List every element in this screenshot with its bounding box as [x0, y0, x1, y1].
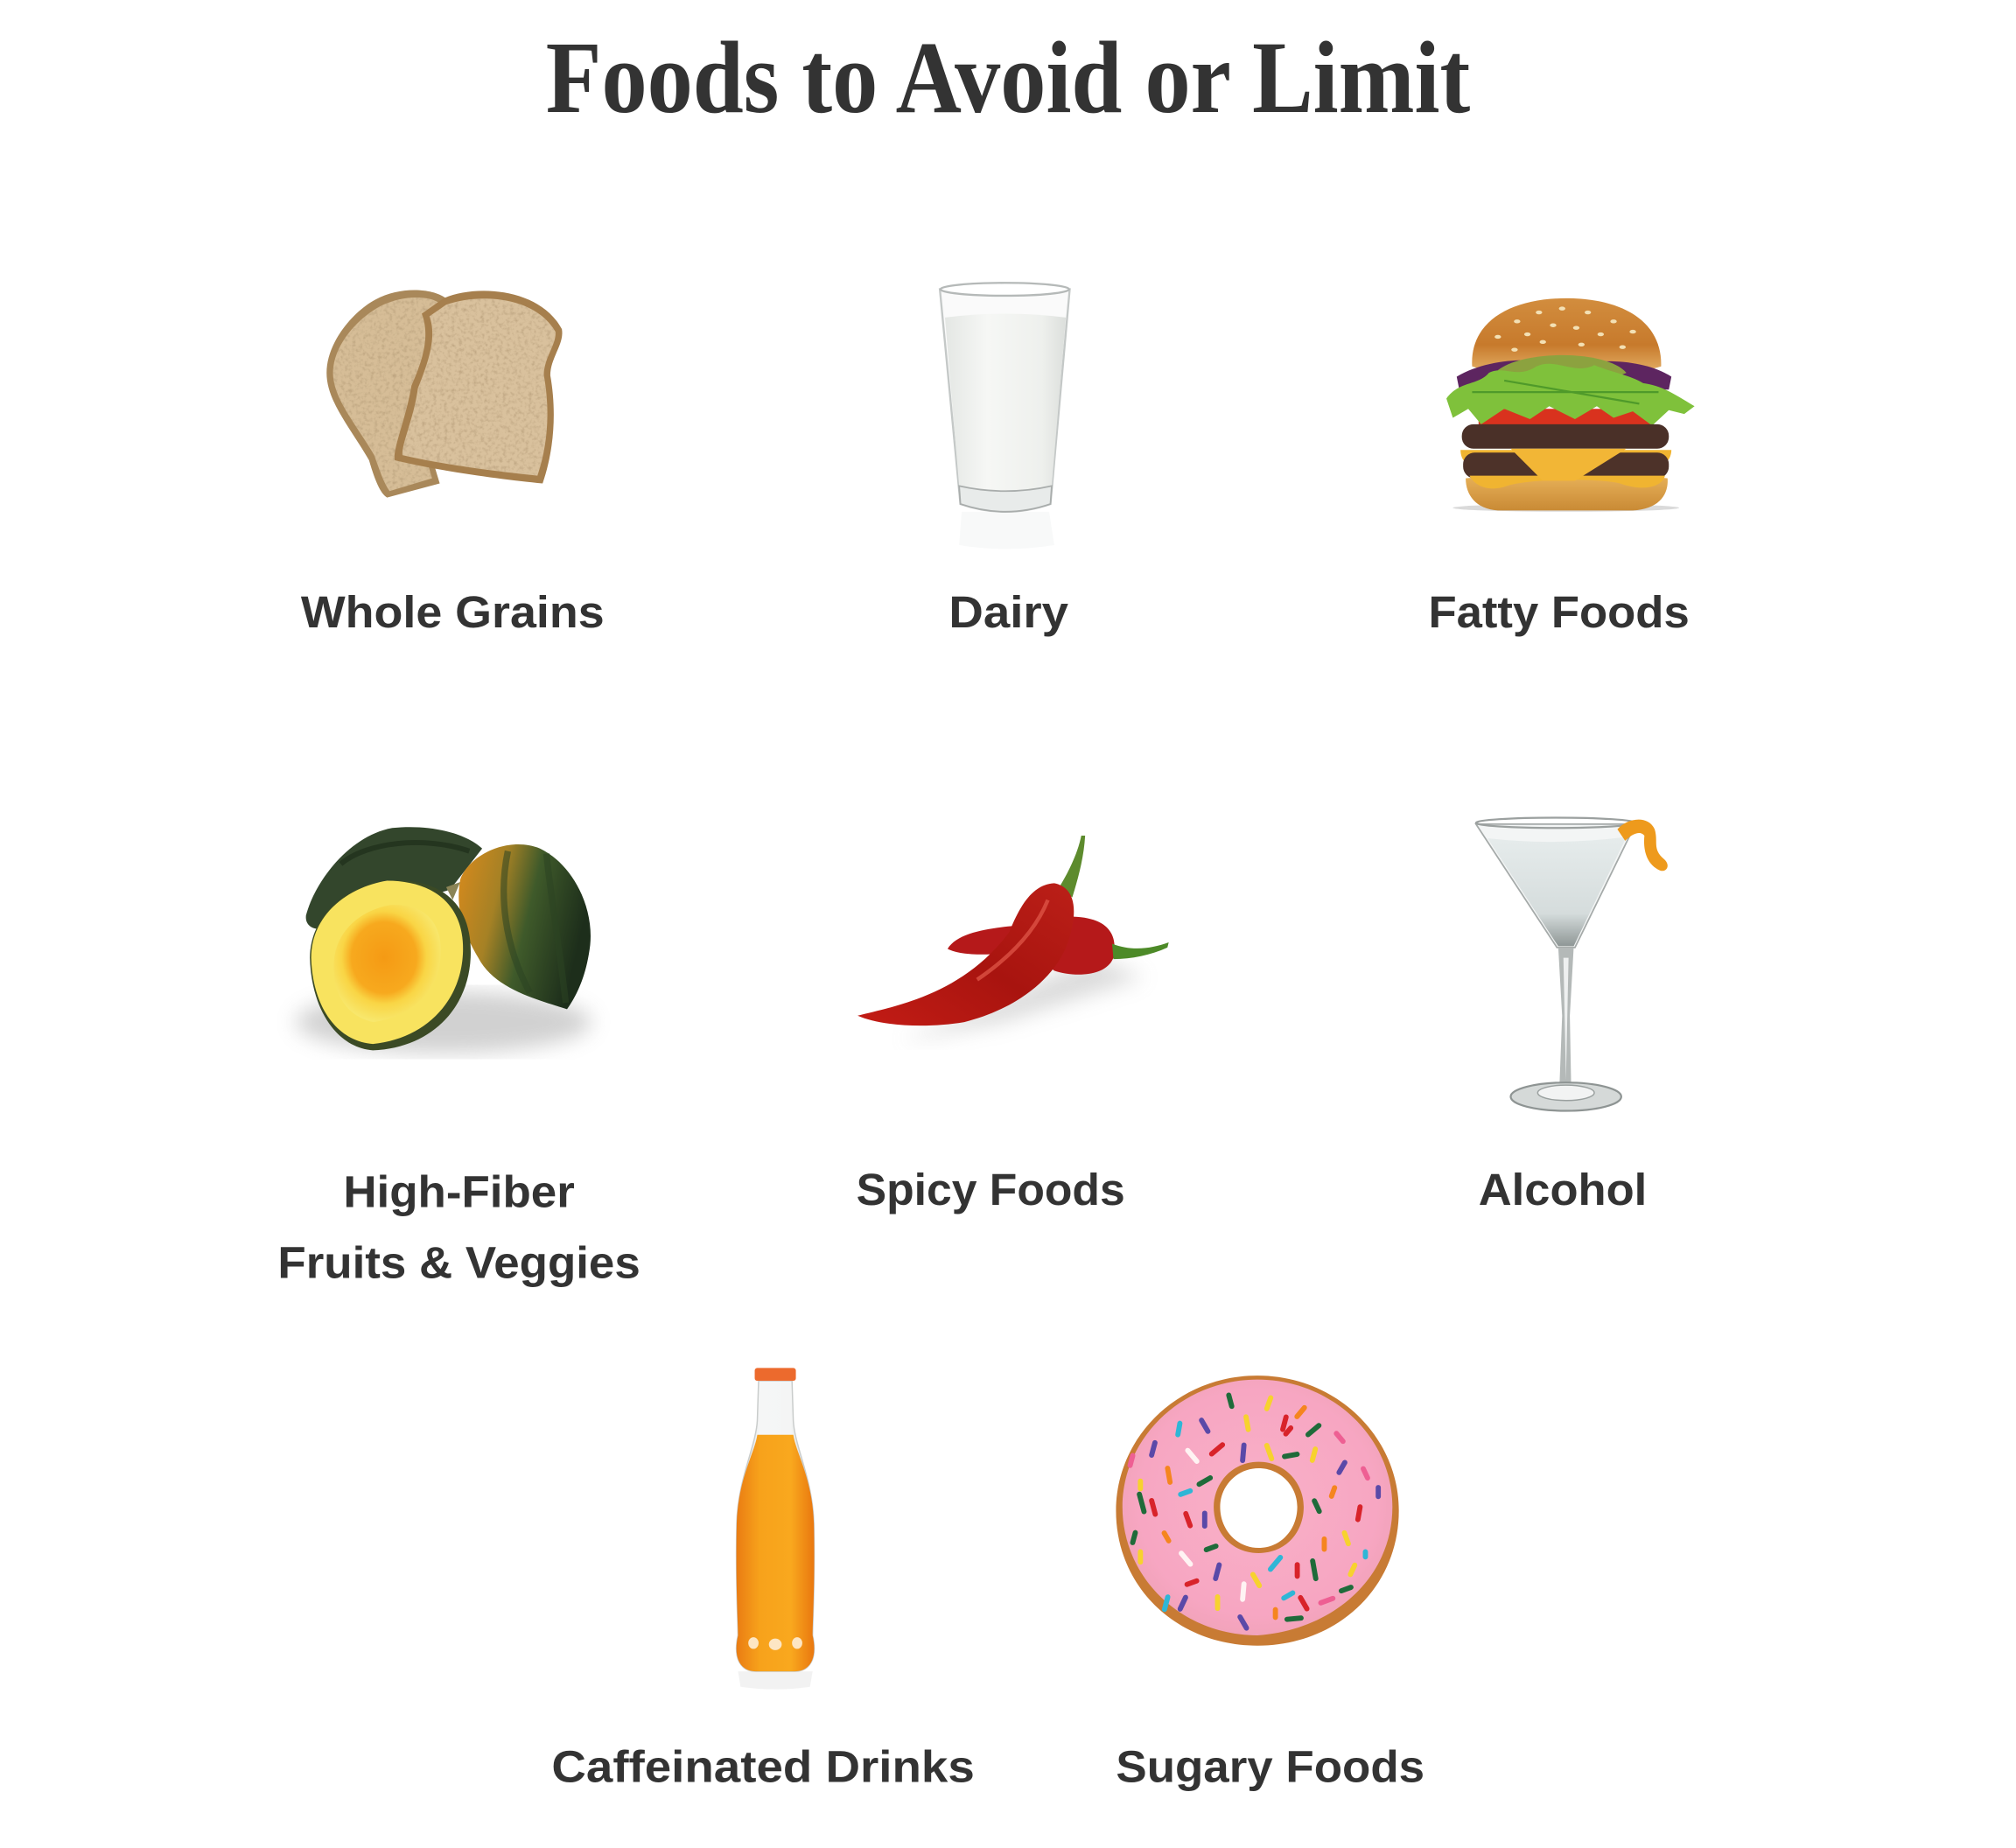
label: high-fiber fruits and veggies: [277, 1166, 640, 1288]
icon: acorn squash: [296, 827, 592, 1053]
title: Foods to Avoid or Limit: [546, 21, 1470, 135]
label: high-fiber fruits and veggies: High-Fiber: [343, 1166, 575, 1217]
panel: caffeinated drinks: [551, 1368, 975, 1791]
panel: spicy foods: [857, 836, 1169, 1214]
icon: bread slices: [326, 290, 563, 498]
panel: alcohol: [1476, 817, 1668, 1214]
icon: glass of milk: [940, 283, 1070, 549]
icon: pink sprinkled donut: [1116, 1376, 1399, 1646]
icon: double cheeseburger: [1446, 298, 1695, 512]
panel: sugary foods: [1116, 1376, 1424, 1791]
label: sugary foods: Sugary Foods: [1116, 1740, 1424, 1791]
label: spicy foods: Spicy Foods: [857, 1164, 1125, 1214]
label: fatty foods: Fatty Foods: [1428, 586, 1690, 637]
icon: red chili peppers: [858, 836, 1169, 1041]
panel: whole grains: [301, 290, 605, 637]
label: caffeinated drinks: Caffeinated Drinks: [551, 1740, 975, 1791]
panel: dairy: [940, 283, 1070, 637]
sprinkles: [1127, 1392, 1381, 1632]
panel: fatty foods: [1428, 298, 1695, 637]
label: dairy: Dairy: [948, 586, 1068, 637]
icon: martini glass: [1476, 817, 1668, 1110]
icon: orange soda bottle: [737, 1368, 815, 1690]
label: whole grains: Whole Grains: [301, 586, 605, 637]
panel: high-fiber fruits and veggies: [277, 827, 640, 1288]
label: high-fiber fruits and veggies: Fruits & Veggies: [277, 1237, 640, 1288]
label: alcohol: Alcohol: [1479, 1164, 1647, 1214]
